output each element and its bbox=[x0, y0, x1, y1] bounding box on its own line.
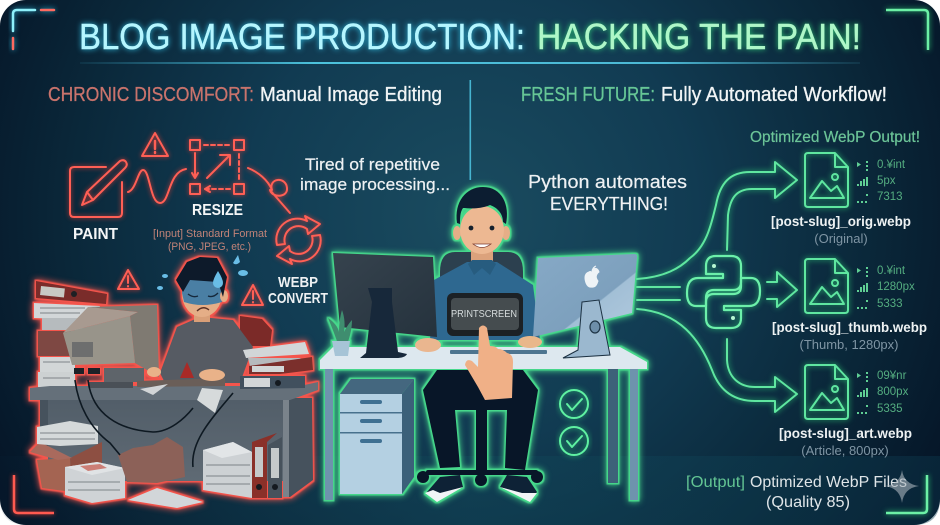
title part: cyan: BLOG IMAGE PRODUCTION: bbox=[79, 16, 525, 57]
arrow: to thumb bbox=[637, 272, 797, 307]
filename: [post-slug]_art.webp bbox=[779, 426, 912, 441]
pointing hand bbox=[465, 326, 513, 400]
illustration: overwhelmed person at messy desk bbox=[30, 257, 318, 508]
icon: apple logo bbox=[585, 266, 599, 287]
filename: [post-slug]_thumb.webp bbox=[772, 320, 927, 335]
caption: python automates: Python automates bbox=[528, 172, 687, 192]
chair base bbox=[417, 405, 543, 486]
label: webp convert: WEBP bbox=[278, 274, 318, 291]
icon: webp convert bbox=[276, 216, 321, 264]
stats bbox=[877, 370, 909, 415]
right monitor bbox=[533, 254, 637, 358]
corner bracket: bottom right bbox=[886, 475, 927, 513]
arrow: to article bbox=[637, 309, 797, 412]
heading: optimized output: Optimized WebP Output! bbox=[750, 129, 920, 146]
desk top bbox=[320, 347, 647, 369]
descriptor: (Original) bbox=[814, 231, 868, 246]
label: webp convert: CONVERT bbox=[268, 290, 328, 307]
descriptor: (Thumb, 1280px) bbox=[800, 337, 898, 352]
output summary: (Quality 85) bbox=[766, 494, 850, 511]
label: webp convert bbox=[268, 274, 328, 307]
head bbox=[176, 257, 228, 322]
stat icons bbox=[857, 161, 868, 203]
output summary: Optimized WebP Files bbox=[750, 474, 907, 491]
title part: green: HACKING THE PAIN! bbox=[537, 16, 861, 57]
torso bbox=[430, 262, 540, 340]
caption: tired: Tired of repetitive bbox=[305, 155, 440, 174]
stat icons bbox=[857, 267, 868, 309]
icon: warning bbox=[142, 133, 168, 156]
stats: 5333 bbox=[877, 298, 903, 310]
stats: 0.¥int bbox=[877, 265, 906, 277]
printscreen label: PRINTSCREEN bbox=[451, 308, 517, 320]
chair back bbox=[440, 252, 523, 290]
label: paint: PAINT bbox=[73, 226, 118, 243]
stats: 7313 bbox=[877, 191, 903, 203]
caption: python automates: EVERYTHING! bbox=[550, 194, 668, 214]
caption: tired: image processing... bbox=[300, 175, 450, 194]
file output: thumb bbox=[772, 259, 927, 352]
label: input format: [Input] Standard Format bbox=[153, 228, 267, 240]
icon: python logo bbox=[687, 256, 760, 328]
corner bracket: bottom left bbox=[14, 475, 54, 513]
check marks bbox=[560, 390, 588, 455]
keyboard and hands bbox=[415, 336, 547, 354]
title bbox=[79, 16, 861, 57]
label: resize: RESIZE bbox=[192, 202, 243, 219]
stats: 800px bbox=[877, 386, 909, 398]
caption: tired bbox=[300, 155, 450, 194]
heading: fresh future: Fully Automated Workflow! bbox=[661, 84, 887, 106]
keyboard and hands bbox=[137, 367, 225, 387]
corner bracket: top left bbox=[13, 10, 54, 49]
boxes and paper piles bbox=[30, 421, 282, 508]
loop connector bbox=[248, 168, 290, 213]
filename: [post-slug]_orig.webp bbox=[771, 214, 911, 229]
wavy connector bbox=[128, 169, 186, 203]
torso bbox=[160, 317, 253, 383]
desk top bbox=[30, 382, 318, 400]
heading: chronic discomfort: CHRONIC DISCOMFORT: bbox=[48, 84, 254, 106]
chair bbox=[240, 316, 272, 346]
output summary bbox=[686, 474, 907, 511]
warning triangles bbox=[118, 270, 263, 305]
file output: original bbox=[771, 153, 911, 246]
icon: file image bbox=[805, 365, 848, 419]
left monitor bbox=[333, 253, 437, 358]
stats: 0.¥int bbox=[877, 159, 906, 171]
output summary: [Output] bbox=[686, 474, 745, 491]
binder stack right bbox=[240, 342, 313, 389]
descriptor: (Article, 800px) bbox=[801, 443, 889, 458]
heading: fresh future: FRESH FUTURE: bbox=[521, 84, 655, 106]
stats bbox=[877, 159, 906, 203]
stats: 1280px bbox=[877, 281, 915, 293]
red triangle behind arm bbox=[180, 362, 194, 378]
heading: chronic discomfort: Manual Image Editing bbox=[260, 84, 442, 106]
label: input format: (PNG, JPEG, etc.) bbox=[168, 241, 251, 253]
desk rear legs and drawers bbox=[325, 369, 638, 500]
automation flow arrows bbox=[637, 162, 797, 412]
sweat drops bbox=[157, 255, 248, 290]
icon: file image bbox=[805, 153, 848, 207]
corner bracket: top right bbox=[886, 10, 928, 50]
stats bbox=[877, 265, 915, 310]
stats: 5px bbox=[877, 175, 896, 187]
stats: 5335 bbox=[877, 403, 903, 415]
heading: fresh future bbox=[521, 84, 887, 106]
illustration: happy developer at clean desk bbox=[320, 187, 647, 502]
printscreen key bbox=[447, 293, 523, 336]
head bbox=[453, 187, 510, 275]
legs bbox=[423, 370, 538, 470]
arrow: to original bbox=[637, 162, 797, 279]
stat icons bbox=[857, 372, 868, 414]
icon: paint bbox=[70, 160, 127, 217]
watermark star bbox=[885, 470, 919, 503]
shoes bbox=[425, 475, 537, 502]
pain workflow icons bbox=[70, 133, 321, 264]
desk body bbox=[40, 398, 313, 497]
file output: article bbox=[779, 365, 912, 458]
icon: resize bbox=[190, 140, 244, 194]
caption: python automates bbox=[528, 172, 687, 214]
stats: 09¥nr bbox=[877, 370, 907, 382]
plant bbox=[328, 310, 352, 356]
loose cables and paper bbox=[75, 380, 233, 467]
heading: chronic discomfort bbox=[48, 84, 442, 106]
label: input format bbox=[153, 228, 267, 253]
binder stack left bbox=[34, 281, 107, 387]
floor band bbox=[0, 456, 940, 525]
icon: file image bbox=[805, 259, 848, 313]
CRT monitor bbox=[63, 305, 159, 388]
